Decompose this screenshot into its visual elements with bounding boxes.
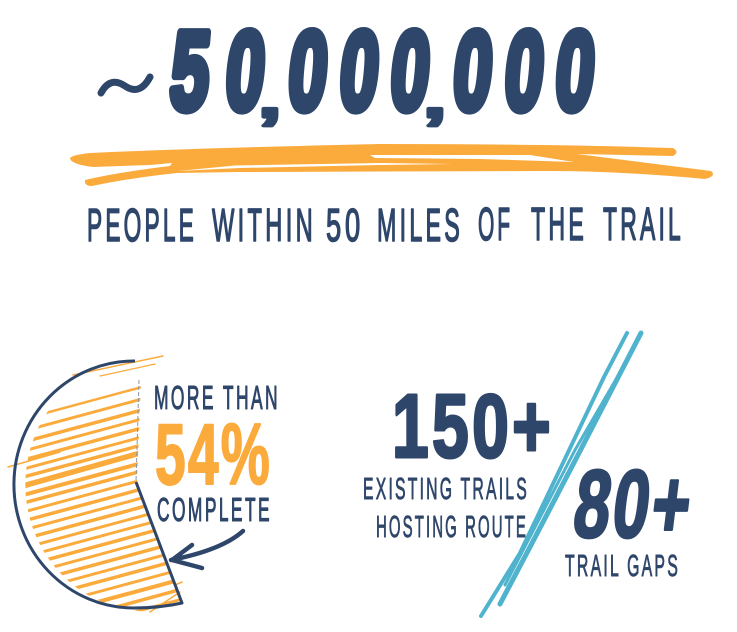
subtitle: [87, 198, 684, 251]
hatching: [7, 355, 183, 613]
stat: 150+ existing trails: EXISTING TRAILS: [363, 471, 529, 506]
subtitle: MILES: [377, 199, 463, 251]
subtitle: PEOPLE: [87, 199, 197, 251]
stat: 150+ existing trails: 150+: [392, 377, 554, 477]
subtitle: OF: [478, 198, 513, 250]
pie chart: 54 percent complete: [7, 355, 184, 613]
headline number: 000: [284, 8, 435, 133]
stat: 80+ trail gaps: [565, 451, 700, 583]
subtitle: THE: [531, 198, 587, 250]
label: more than 54% complete: COMPLETE: [157, 491, 272, 528]
label: more than 54% complete: MORE THAN: [154, 379, 280, 416]
teal slash divider: [481, 333, 641, 616]
label: more than 54% complete: 54%: [155, 407, 272, 503]
tilde: [101, 77, 150, 93]
label: more than 54% complete: [154, 379, 280, 528]
pie outline: [14, 361, 182, 608]
commas: ,: [258, 67, 282, 130]
commas: [258, 67, 447, 130]
orange underline: [70, 144, 713, 186]
headline number: 000: [449, 8, 600, 133]
subtitle: 50: [326, 199, 364, 251]
subtitle: WITHIN: [212, 199, 316, 251]
arrow to pie: [171, 531, 243, 568]
commas: ,: [423, 67, 447, 130]
headline number: 50: [166, 8, 270, 133]
stat: 150+ existing trails: HOSTING ROUTE: [376, 509, 528, 544]
headline number: [101, 8, 600, 133]
stat: 150+ existing trails: [363, 377, 554, 544]
